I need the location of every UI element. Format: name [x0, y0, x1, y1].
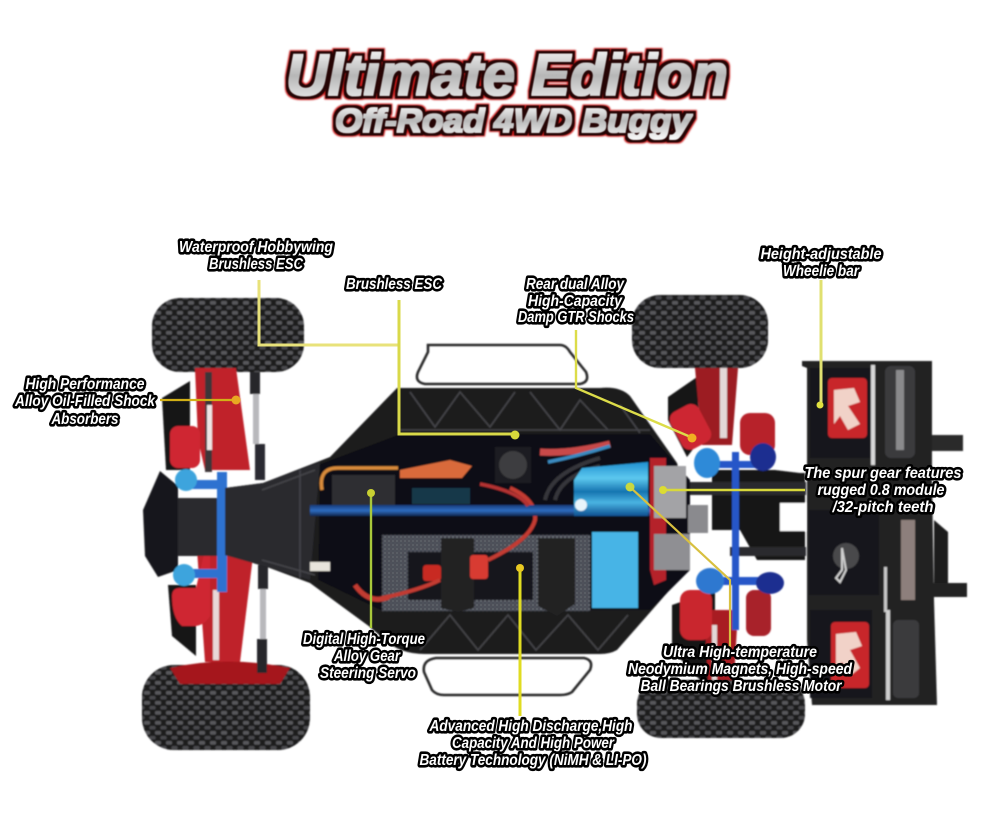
front suspension	[143, 368, 290, 684]
receiver wires	[400, 460, 472, 478]
blue hubs	[694, 443, 784, 630]
callout: battery: Advanced High Discharge,High	[429, 718, 632, 735]
callout: rear shocks: Rear dual Alloy	[526, 276, 625, 293]
chassis	[225, 388, 708, 654]
rear crossbar and frame	[712, 470, 805, 560]
callout: steering servo: Digital High-Torque	[303, 631, 425, 648]
heading: Ultimate Edition: Ultimate Edition	[286, 43, 728, 108]
callout: rear shocks	[518, 276, 634, 326]
callout: shock absorbers: Absorbers	[51, 411, 119, 428]
tyre: front top	[152, 298, 304, 372]
bumper loops	[417, 345, 591, 695]
callout: brushless ESC: Brushless ESC	[346, 276, 443, 293]
callout: waterproof ESC	[179, 239, 333, 273]
wing	[802, 361, 967, 705]
carbon battery tray	[382, 535, 590, 611]
electronics tub	[318, 434, 690, 610]
cooling fan	[495, 447, 531, 483]
callout: spur gear: rugged 0.8 module	[818, 482, 945, 499]
callout: battery	[420, 718, 646, 769]
callout: waterproof ESC: Brushless ESC	[209, 256, 304, 273]
drive shaft	[310, 505, 655, 516]
callout: steering servo: Alloy Gear	[333, 648, 401, 665]
blue steering hardware	[173, 469, 227, 592]
callout: motor: Ultra High-temperature	[663, 644, 817, 661]
callout: waterproof ESC: Waterproof Hobbywing	[179, 239, 333, 256]
straps	[441, 538, 474, 612]
servo	[332, 475, 395, 505]
callout: spur gear: The spur gear features	[804, 465, 962, 482]
red shock top	[170, 426, 200, 468]
callout: wheelie bar: Height-adjustable	[760, 246, 882, 263]
subheading: Off-Road 4WD Buggy: Off-Road 4WD Buggy	[335, 102, 693, 139]
wing decal bottom	[831, 622, 869, 688]
leader lines	[160, 280, 824, 716]
callout: motor	[628, 644, 852, 695]
buggy illustration	[142, 295, 967, 750]
esc wires	[540, 444, 610, 452]
front bumper	[143, 471, 178, 577]
callout: shock absorbers	[14, 376, 156, 428]
callout: spur gear	[804, 465, 962, 516]
tyre: rear bottom	[637, 680, 805, 738]
red shock bottom	[172, 554, 210, 626]
gear housing	[650, 458, 666, 585]
callout: motor: Neodymium Magnets, High-speed	[628, 661, 852, 678]
wing decal top	[828, 378, 867, 438]
motor	[574, 462, 648, 516]
callout labels	[14, 239, 962, 769]
callout: shock absorbers: Alloy Oil-Filled Shock	[14, 393, 156, 410]
rear suspension	[666, 368, 806, 680]
callout: battery: Battery Technology (NiMH & LI-PO)	[420, 752, 646, 769]
callout: battery: Capacity And High Power	[452, 735, 615, 752]
tyre: rear top	[632, 295, 768, 368]
callout: rear shocks: Damp GTR Shocks	[518, 309, 634, 326]
leader dots	[232, 396, 824, 572]
blue battery pad	[592, 532, 638, 608]
callout: wheelie bar: Wheelie bar	[783, 263, 860, 280]
callout: shock absorbers: High Performance	[26, 376, 145, 393]
callout: wheelie bar	[760, 246, 882, 280]
callout: steering servo: Steering Servo	[320, 665, 416, 682]
battery plugs	[423, 565, 441, 581]
title	[286, 43, 728, 139]
tyre: front bottom	[142, 665, 310, 750]
callout: spur gear: /32-pitch teeth	[832, 499, 934, 516]
callout: motor: Ball Bearings Brushless Motor	[640, 678, 842, 695]
callout: rear shocks: High-Capacity	[528, 293, 623, 310]
callout: steering servo	[303, 631, 425, 682]
